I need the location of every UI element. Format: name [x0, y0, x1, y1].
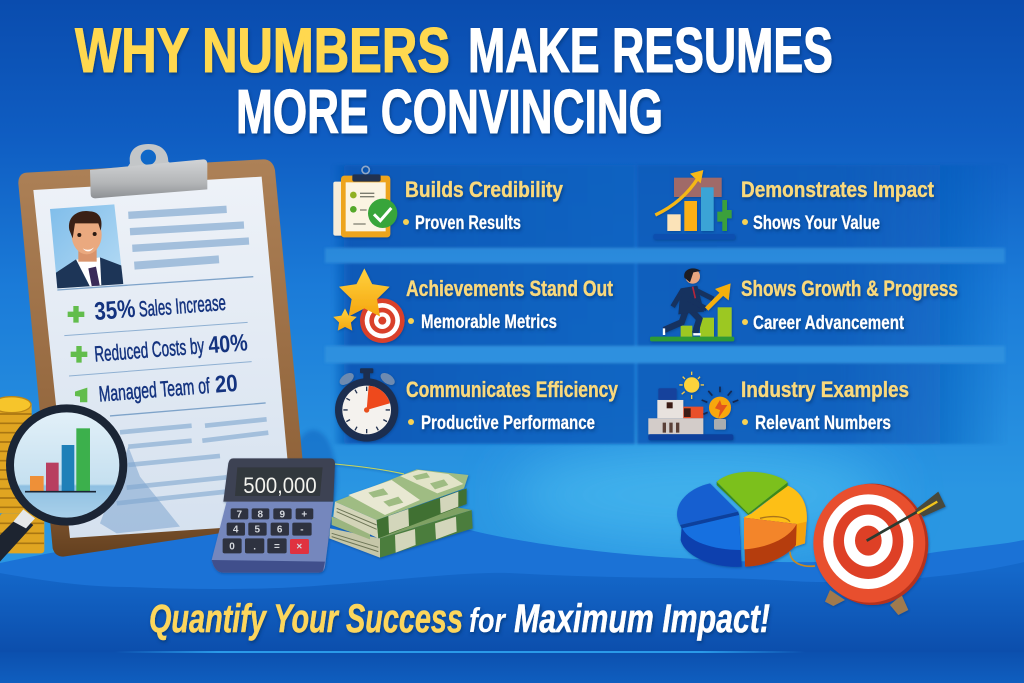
metric: 35% sales increase: 35% [93, 295, 136, 326]
resume paper [33, 177, 293, 538]
icon: man climbing bars [650, 268, 734, 341]
background glow [510, 445, 890, 545]
bullet text: Memorable Metrics [421, 312, 557, 333]
calculator [212, 458, 335, 573]
icon: star and target [333, 268, 405, 343]
icon: clipboard with check [333, 166, 397, 237]
profile photo [50, 204, 125, 290]
bullet text: Productive Performance [421, 413, 595, 434]
calculator: 6 [277, 525, 283, 536]
bullet text: Career Advancement [753, 313, 905, 334]
pie chart and target [677, 472, 946, 615]
tagline: Quantify Your Success [149, 597, 463, 641]
illustration: resume on clipboard [18, 144, 337, 557]
title: MAKE RESUMES [468, 16, 833, 86]
heading: Builds Credibility [405, 177, 564, 202]
magnifying glass [0, 404, 127, 562]
metric: reduced costs by 40%: Reduced Costs by [93, 333, 205, 367]
panel: demonstrates impact [653, 170, 935, 240]
calculator: + [301, 509, 307, 520]
clipboard board [18, 159, 308, 557]
tagline: for [469, 602, 506, 640]
tagline: Maximum Impact! [514, 597, 770, 641]
panel: communicates efficiency [335, 368, 619, 442]
calculator: 5 [255, 525, 261, 536]
bullet text: Shows Your Value [753, 213, 880, 234]
panel: achievements stand out [333, 268, 614, 343]
metric: managed team of 20: 20 [214, 370, 239, 399]
icon: building, sun and light bulb [648, 372, 738, 440]
cord [790, 552, 815, 566]
background wave [0, 518, 1024, 683]
metric: 35% sales increase [68, 290, 227, 326]
icon: rising bar chart [653, 170, 735, 240]
coin stacks [0, 397, 44, 553]
target with arrow [813, 484, 946, 615]
panel: shows growth and progress [650, 268, 958, 341]
bullet text: Proven Results [415, 213, 521, 234]
bullet text: Relevant Numbers [755, 413, 891, 434]
metric: 35% sales increase: Sales Increase [138, 290, 227, 322]
calculator: 4 [233, 525, 239, 536]
pie chart [677, 472, 807, 567]
title [75, 16, 833, 147]
calculator: - [300, 525, 304, 536]
metric: reduced costs by 40%: 40% [207, 329, 249, 359]
bottom band [0, 562, 1024, 683]
illustration: coins, magnifier, calculator [0, 397, 335, 573]
heading: Industry Examples [741, 377, 909, 402]
calculator: 9 [280, 509, 286, 520]
calculator: 8 [258, 509, 264, 520]
magnifier shadow on paper [100, 447, 180, 533]
placeholder lines [57, 209, 268, 503]
panel: builds credibility [333, 166, 564, 237]
calculator: × [296, 541, 302, 552]
heading: Demonstrates Impact [741, 177, 935, 202]
heading: Shows Growth & Progress [741, 276, 958, 301]
calculator: = [274, 541, 280, 552]
calculator keys [223, 508, 313, 554]
calculator display value: 500,000 [243, 473, 317, 498]
metric: managed team of 20: Managed Team of [98, 373, 211, 407]
title: WHY NUMBERS [75, 16, 450, 86]
heading: Communicates Efficiency [406, 377, 619, 402]
calculator: . [253, 541, 256, 552]
metal clip [90, 144, 207, 198]
metric: managed team of 20 [75, 370, 239, 407]
panel grid [325, 165, 1007, 444]
title: MORE CONVINCING [236, 78, 663, 147]
heading: Achievements Stand Out [406, 276, 614, 301]
calculator: 7 [237, 509, 243, 520]
cash stacks [329, 464, 473, 558]
calculator: 0 [229, 541, 235, 552]
icon: stopwatch [335, 368, 398, 442]
panel: industry examples [648, 372, 909, 440]
